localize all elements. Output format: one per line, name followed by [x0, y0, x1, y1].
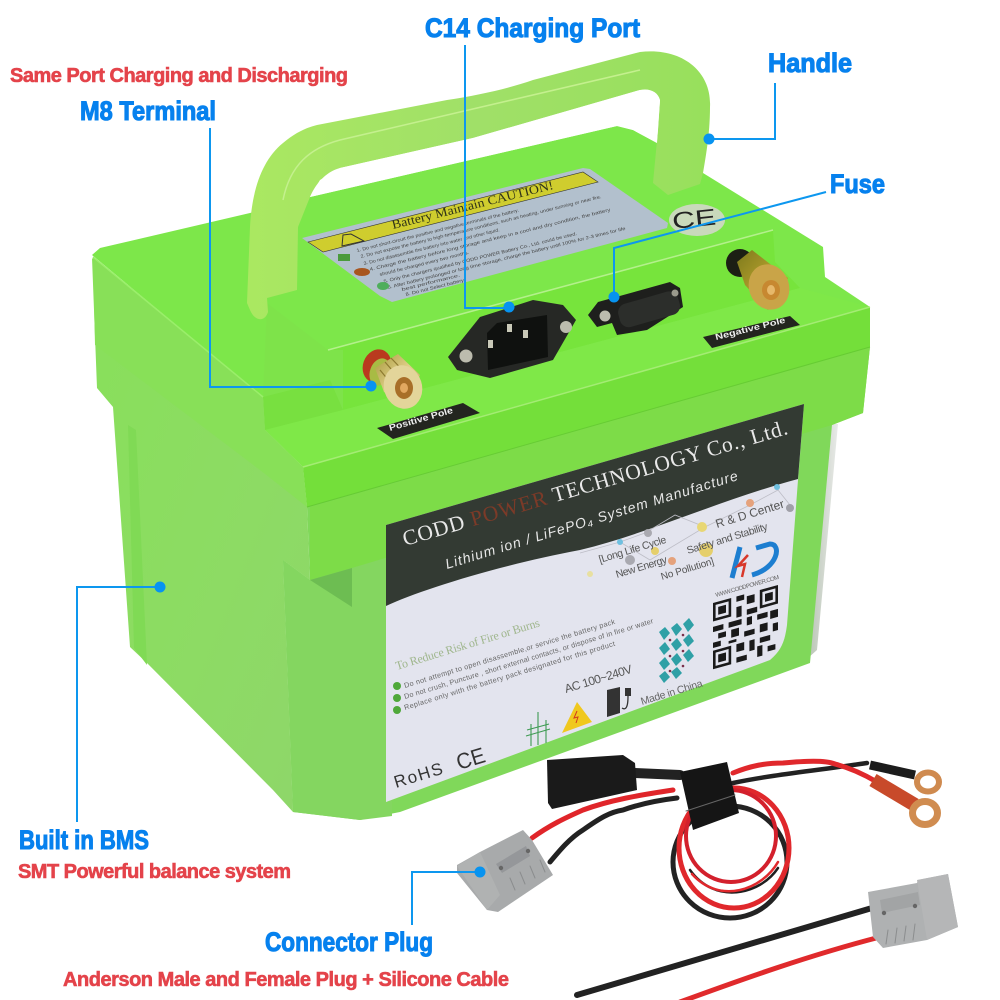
- cable set: [457, 755, 958, 1000]
- heading: connector: Connector Plug: [265, 927, 433, 957]
- company name: CODD POWER TECHNOLOGY Co., Ltd.: [400, 415, 790, 551]
- heading: fuse: Fuse: [830, 169, 885, 199]
- crystal structure: [659, 618, 694, 683]
- negative pole tag: Negative Pole: [714, 315, 787, 342]
- CE sticker: [669, 204, 725, 236]
- left Anderson plug: [457, 830, 553, 912]
- caution text: 3. Do not disassemble the battery into water and other liquid.: [363, 227, 500, 266]
- caution title: Battery Maintain CAUTION!: [390, 178, 555, 232]
- caution text: 2. Do not expose the battery to high-temperature conditions, such as heating, under sunning or near fire.: [360, 194, 602, 259]
- right Anderson plug: [868, 874, 958, 948]
- leader: connector: [412, 866, 486, 925]
- battery: [92, 51, 870, 820]
- caption: Anderson: Anderson Male and Female Plug + Silicone Cable: [63, 969, 509, 991]
- harness wires: [532, 790, 673, 838]
- black connector: [547, 755, 637, 809]
- lid front skirt: [303, 307, 870, 507]
- QR code: [713, 585, 778, 669]
- network graphic: [580, 484, 794, 577]
- CE sticker: CE: [671, 204, 717, 234]
- icon: negative terminal: [726, 249, 796, 315]
- leader: M8: [210, 128, 376, 392]
- network captions: New Energy: [614, 554, 669, 581]
- voltage: AC 100~240V: [563, 662, 634, 696]
- white gap under handle: [310, 90, 660, 197]
- leader: fuse: [608, 192, 826, 302]
- website: WWW.CODDPOWER.COM: [715, 575, 780, 599]
- caution text: 6. After battery prolonged or long time storage, charge the battery until 100% for 2-3 times for life: [387, 226, 626, 290]
- icon: positive terminal: [358, 345, 428, 414]
- warning list: Do not attempt to open disassemble,or service the battery pack: [403, 617, 616, 690]
- positive pole tag: [377, 403, 480, 439]
- caution text: 8. Do not Select battery: [405, 277, 465, 297]
- leader: handle: [704, 83, 775, 144]
- icon: fuse holder: [588, 282, 683, 335]
- handle: [247, 51, 710, 319]
- caution label: [302, 168, 668, 302]
- caution text: should be charged every two months.: [379, 250, 470, 277]
- icon: charging station: [607, 687, 631, 717]
- positive pole tag: Positive Pole: [388, 405, 454, 433]
- silver side strip: [808, 424, 838, 658]
- upper platform wall: [328, 230, 800, 410]
- caution text: 4. Charge the battery before long storage and keep in a cool and dry condition, the battery: [369, 207, 612, 272]
- loose wires: [577, 908, 872, 995]
- warning list: Replace only with the battery pack designated for this product: [403, 639, 616, 712]
- caution text: 5. Only the chargers qualified by CODD POWER Battery Co., Ltd. could be used.: [383, 231, 577, 284]
- caution text: [356, 194, 626, 297]
- product line: Lithium ion / LiFePO₄ System Manufacture: [443, 467, 740, 572]
- body left face: [92, 258, 310, 812]
- coiled wires: [673, 788, 789, 918]
- icon: warning triangle: [562, 702, 592, 733]
- ledge: [265, 288, 870, 467]
- made in china: Made in China: [639, 678, 704, 708]
- clip: [680, 762, 739, 830]
- caption: SMT: SMT Powerful balance system: [18, 861, 291, 883]
- step: [263, 380, 343, 430]
- network captions: [597, 497, 786, 583]
- network captions: No Pollution]: [660, 556, 716, 583]
- warning list: Do not crush, Puncture , short external contacts, or dispose of in fire or water: [403, 616, 655, 701]
- ring terminals: [870, 765, 939, 824]
- icon: wind turbine: [526, 712, 550, 746]
- icon: C14 inlet: [448, 300, 576, 378]
- caption: same port: Same Port Charging and Discharging: [10, 65, 348, 87]
- network captions: [Long Life Cycle: [597, 534, 668, 566]
- heading: M8: M8 Terminal: [80, 96, 216, 126]
- heading: BMS: Built in BMS: [19, 825, 149, 855]
- lid: [92, 126, 870, 507]
- logo: KD: [732, 544, 776, 578]
- body front face: [283, 347, 870, 820]
- RoHS mark: RoHS: [392, 759, 445, 792]
- network captions: Safety and Stability: [685, 521, 770, 557]
- product label: [386, 404, 804, 802]
- warning heading: To Reduce Risk of Fire or Burns: [394, 616, 542, 673]
- leader: C14: [465, 45, 514, 312]
- caution text: best performance.: [401, 273, 460, 292]
- network captions: R & D Center: [714, 497, 786, 531]
- heading: C14: C14 Charging Port: [425, 13, 640, 43]
- leader: BMS: [77, 582, 166, 822]
- negative pole tag: [703, 315, 800, 348]
- caution text: 1. Do not short-circuit the positive and negative terminals of the battery.: [356, 208, 519, 253]
- heading: handle: Handle: [768, 48, 852, 78]
- platform left wall: [263, 303, 343, 410]
- CE mark: CE: [453, 742, 488, 775]
